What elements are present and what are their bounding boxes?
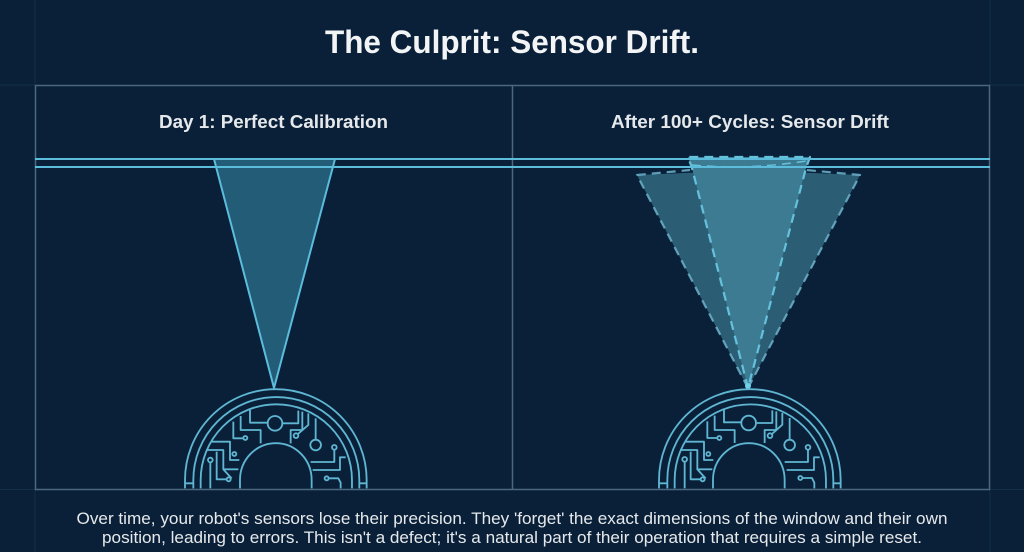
panel heading: after 100+ cycles: After 100+ Cycles: Sensor Drift (611, 111, 889, 132)
icon: circuit sensor, right (659, 389, 841, 488)
icon: circuit sensor, left (185, 389, 367, 488)
panel heading: day 1: Day 1: Perfect Calibration (159, 111, 388, 132)
comparison frame (36, 86, 990, 490)
caption text (76, 510, 948, 547)
drifted sensor beams (637, 157, 860, 389)
calibrated beam (214, 159, 335, 388)
title: The Culprit: Sensor Drift. (325, 24, 699, 60)
sensor reference lines (35, 159, 990, 167)
caption text: position, leading to errors. This isn't a defect; it's a natural part of their operation that requires a simple reset. (102, 529, 922, 547)
caption text: Over time, your robot's sensors lose their precision. They 'forget' the exact dimensions of the window and their own (76, 510, 948, 528)
